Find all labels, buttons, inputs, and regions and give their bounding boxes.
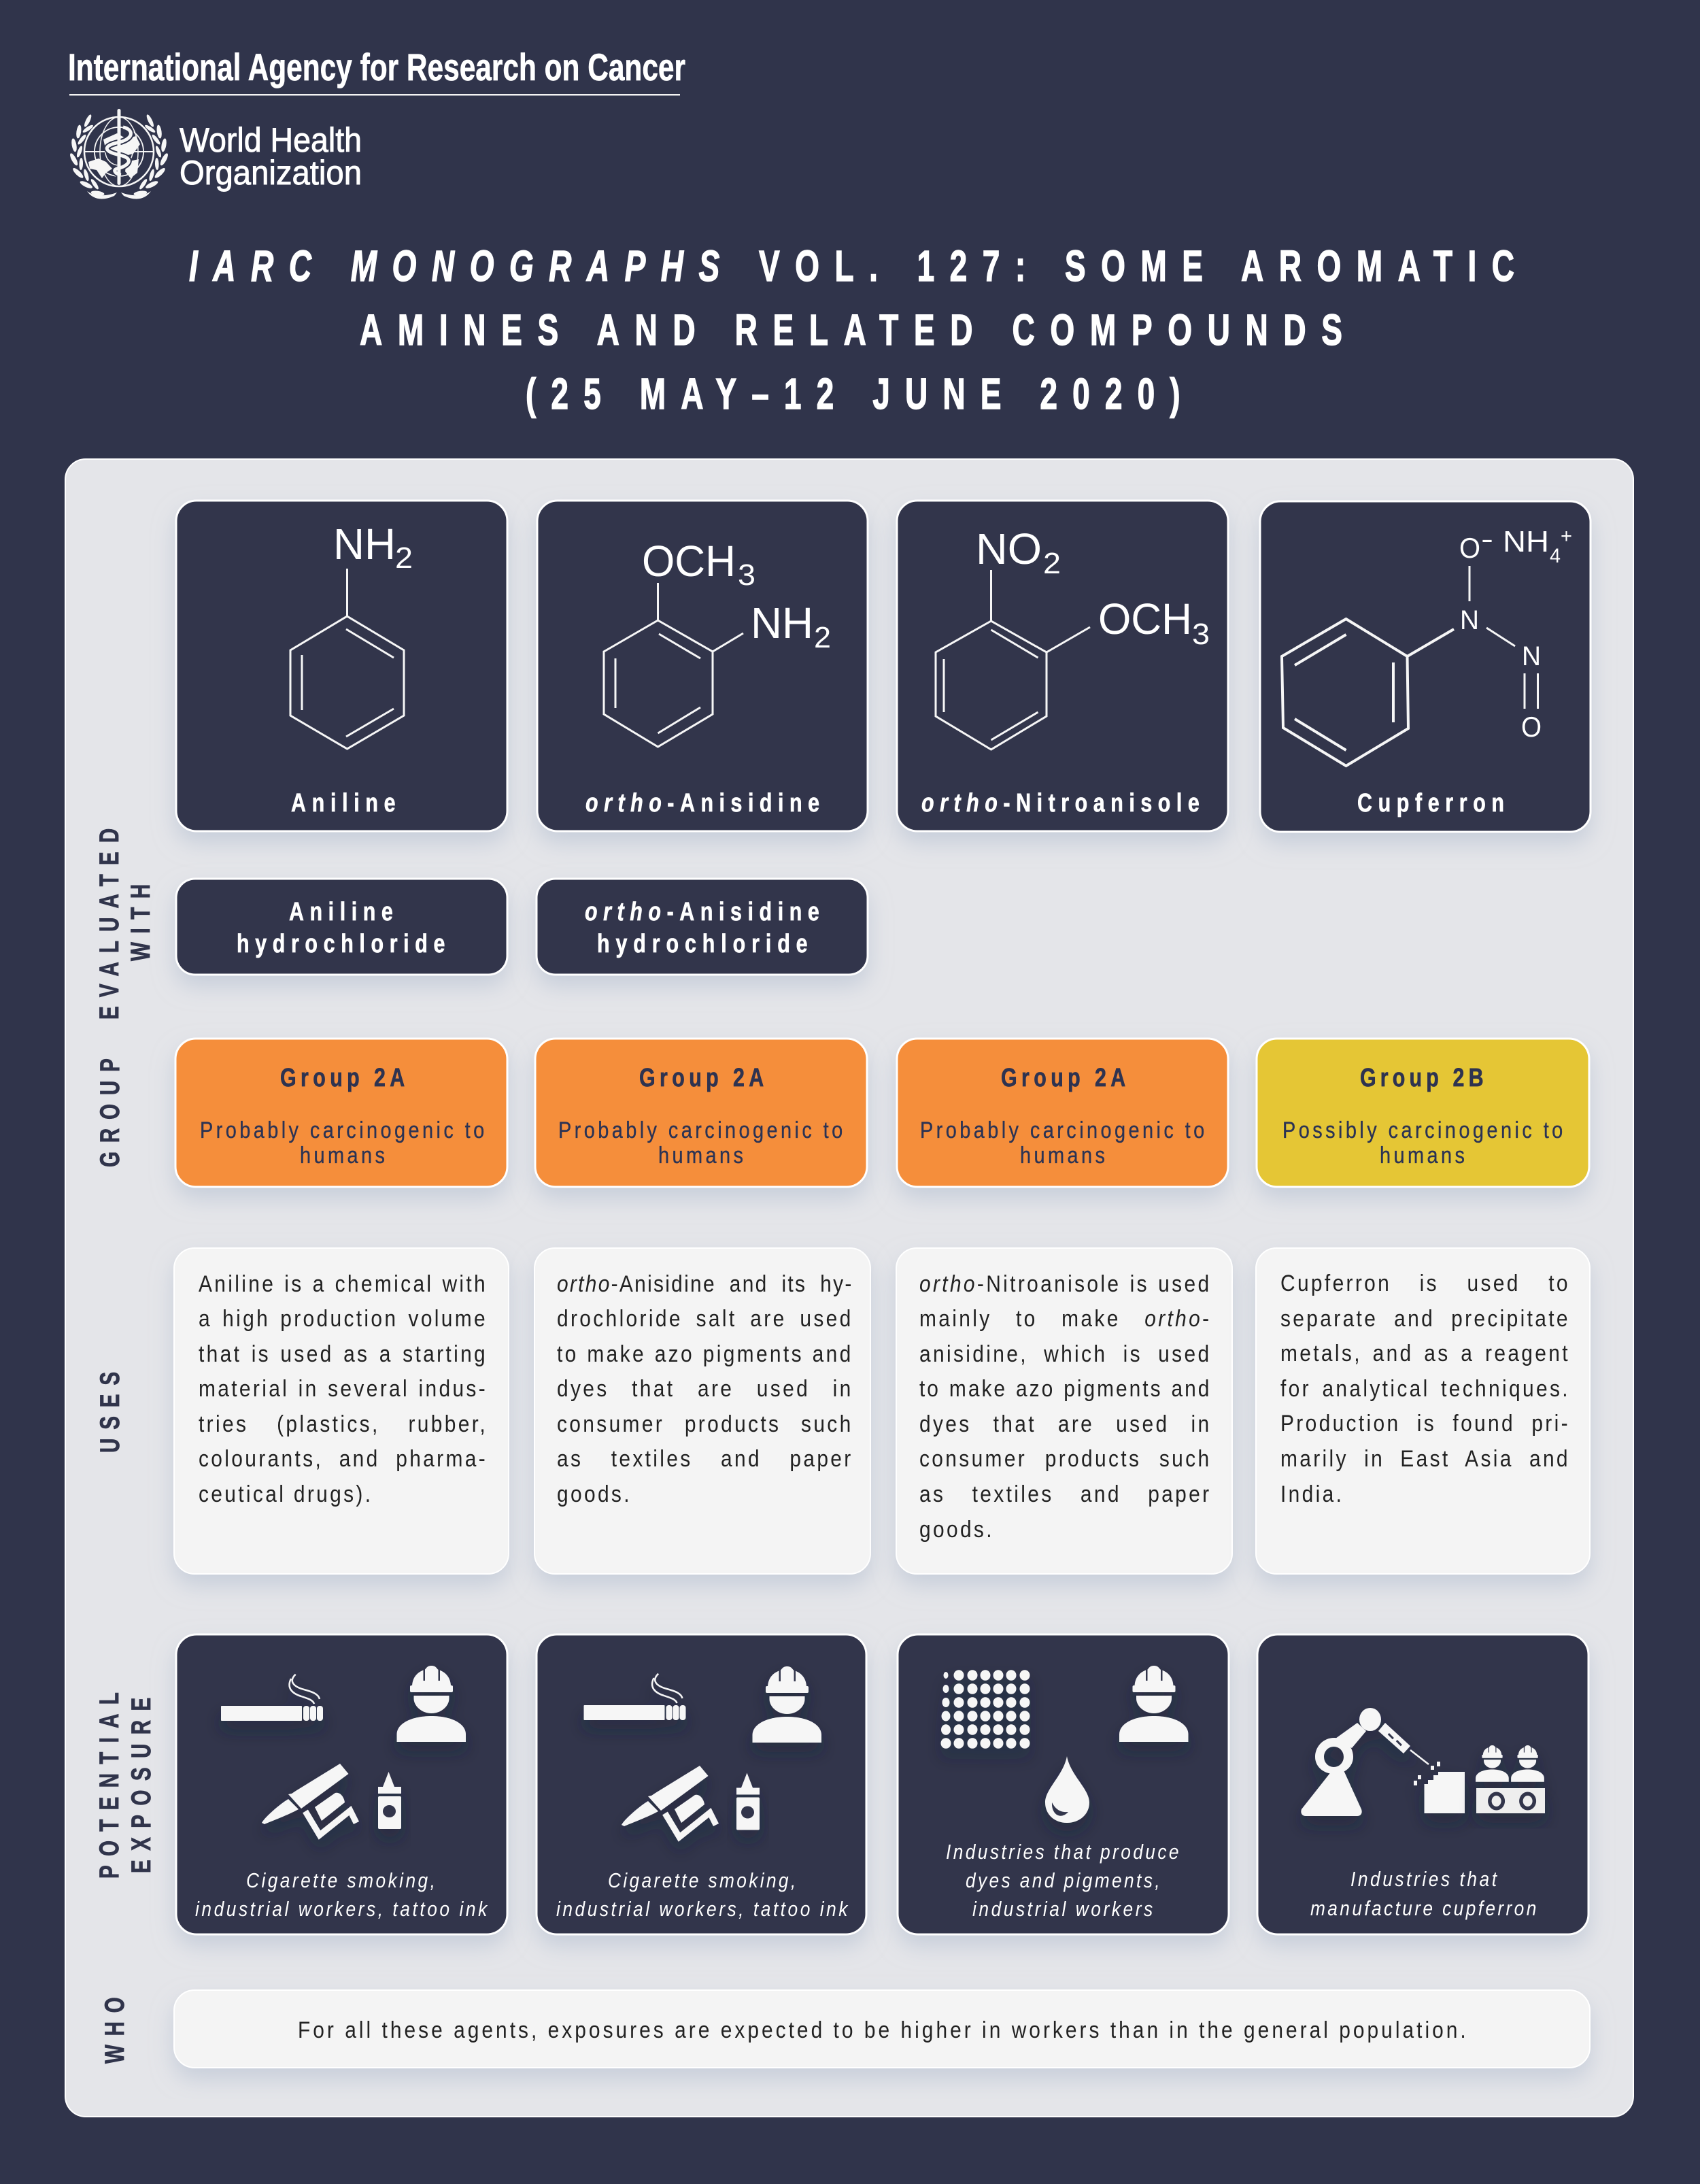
title: (25 MAY–12 JUNE 2020) [526,370,1180,418]
icon: industrial worker [752,1666,821,1743]
structure: ortho-anisidine molecule: 2 [814,621,831,654]
icon: industrial worker [1119,1666,1189,1742]
uses card: ortho-Anisidine: goods. [557,1481,632,1507]
structure: aniline molecule: NH [333,520,396,569]
group card: Aniline Group 2A: Group 2A [280,1064,405,1092]
exposure card: Aniline [176,1634,507,1934]
group card: Cupferron Group 2B: humans [1380,1142,1465,1169]
uses card: Cupferron: Production is found pri- [1280,1411,1570,1437]
uses card: Cupferron [1256,1248,1611,1574]
icon: dye drop [1045,1756,1089,1823]
uses card: ortho-Anisidine: as textiles and paper [557,1446,853,1472]
exposure card: ortho-Nitroanisole [898,1634,1229,1934]
uses card: Cupferron: separate and precipitate [1280,1306,1570,1332]
exposure card: ortho-Anisidine [537,1634,866,1934]
group card: Aniline Group 2A [175,1039,507,1187]
callout: who is exposed [174,1990,1590,2068]
group card: ortho-Nitroanisole Group 2A [897,1039,1228,1187]
icon: material block [1414,1762,1465,1813]
structure: cupferron molecule: N [1460,605,1479,635]
row label: potential exposure [95,1692,156,1879]
title [189,242,1514,418]
uses card: ortho-Anisidine: ortho-Anisidine and its hy- [557,1271,853,1296]
uses card: ortho-Anisidine: drochloride salt are used [557,1306,853,1332]
icon: robotic arm [1301,1708,1429,1816]
structure: cupferron molecule: O [1521,711,1542,743]
heading: International Agency for Research on Cancer: International Agency for Research on Cancer [68,46,685,88]
caption: industrial workers [972,1898,1153,1921]
card: ortho-Anisidine hydrochloride [537,879,868,975]
structure: ortho-anisidine molecule [604,537,831,747]
row label: evaluated with: EVALUATED [95,828,124,1020]
card: ortho-Anisidine hydrochloride: hydrochloride [597,930,808,958]
structure: ortho-nitroanisole molecule [936,524,1210,750]
uses card: Cupferron: India. [1280,1481,1344,1507]
icon: cigarette [583,1674,685,1720]
card: ortho-Anisidine hydrochloride: ortho-Anisidine [585,898,819,926]
group card: ortho-Anisidine Group 2A: Probably carcinogenic to [558,1117,843,1143]
caption: Cigarette smoking, [246,1869,435,1893]
uses card: Cupferron: marily in East Asia and [1280,1446,1570,1472]
caption [946,1841,1179,1921]
caption [195,1869,488,1921]
icon: ink bottle [378,1772,401,1829]
caption [556,1869,849,1921]
icon: pigment dots [941,1670,1030,1749]
uses card: ortho-Anisidine: dyes that are used in [557,1376,853,1402]
structure: cupferron molecule: - [1481,524,1493,554]
group card: ortho-Anisidine Group 2A [535,1039,867,1187]
caption: Cigarette smoking, [608,1869,796,1893]
icon: ink bottle [736,1773,760,1830]
structure: cupferron molecule: O [1459,532,1480,564]
uses card: ortho-Nitroanisole: ortho-Nitroanisole is used [919,1271,1211,1296]
uses card: Cupferron: for analytical techniques. [1280,1376,1570,1402]
structure: ortho-anisidine molecule: OCH [642,537,736,586]
icon: WHO emblem [69,109,169,199]
group card: ortho-Anisidine Group 2A: humans [658,1142,743,1169]
name: Cupferron: Cupferron [1357,789,1504,818]
row label: evaluated with: WITH [126,884,156,961]
uses card: Aniline: ceutical drugs). [199,1481,373,1507]
name: ortho-Anisidine: ortho-Anisidine [585,789,819,818]
group card: ortho-Nitroanisole Group 2A: Probably carcinogenic to [920,1117,1204,1143]
caption: Industries that [1350,1868,1497,1892]
uses card: ortho-Anisidine [534,1248,897,1574]
logo text: World Health Organization: Organization [180,154,362,192]
uses card: ortho-Nitroanisole: to make azo pigments and [919,1376,1211,1402]
caption: manufacture cupferron [1310,1897,1536,1921]
structure: ortho-nitroanisole molecule: OCH [1098,594,1192,643]
structure: aniline molecule [290,520,413,749]
name: ortho-Nitroanisole: ortho-Nitroanisole [921,789,1200,818]
row label: evaluated with [95,828,156,1020]
row label: uses: USES [95,1372,125,1453]
logo text: World Health Organization [180,121,362,192]
group card: Cupferron Group 2B [1257,1039,1589,1187]
icon: two workers [1476,1745,1544,1782]
structure: cupferron molecule [1282,524,1572,766]
uses card: Aniline [174,1248,528,1574]
structure: ortho-nitroanisole molecule: NO [976,524,1042,573]
group card: ortho-Nitroanisole Group 2A: Group 2A [1001,1064,1125,1092]
card: Aniline hydrochloride [176,879,507,975]
uses card: ortho-Anisidine: to make azo pigments and [557,1341,853,1367]
caption [1310,1868,1536,1921]
uses card: ortho-Anisidine: consumer products such [557,1411,853,1437]
rule under agency name [69,94,680,95]
title: IARC MONOGRAPHS VOL. 127: SOME AROMATIC [189,242,1514,290]
structure: ortho-anisidine molecule: 3 [738,558,755,592]
uses card: ortho-Nitroanisole: as textiles and paper [919,1481,1211,1507]
uses card: Aniline: colourants, and pharma- [199,1446,488,1472]
card: Aniline [176,501,507,831]
structure: cupferron molecule: + [1561,525,1572,548]
icon: cigarette [221,1675,323,1721]
header: IARC and WHO logos [68,46,685,199]
card: ortho-Anisidine [537,501,868,831]
group card: ortho-Nitroanisole Group 2A: humans [1020,1142,1105,1169]
structure: aniline molecule: 2 [395,541,413,575]
structure: cupferron molecule: 4 [1550,545,1561,567]
group card: Aniline Group 2A: humans [300,1142,385,1169]
structure: cupferron molecule: N [1522,641,1541,671]
uses card: ortho-Nitroanisole: consumer products such [919,1446,1211,1472]
uses card: ortho-Nitroanisole [896,1248,1254,1574]
uses card: ortho-Nitroanisole: goods. [919,1517,994,1543]
panel: main content [65,459,1633,2117]
uses card: ortho-Nitroanisole: dyes that are used in [919,1411,1211,1437]
card: ortho-Nitroanisole [897,501,1228,831]
row label: group: GROUP [95,1058,125,1167]
structure: ortho-nitroanisole molecule: 2 [1043,547,1061,580]
exposure card: Cupferron [1257,1634,1588,1934]
caption: industrial workers, tattoo ink [195,1898,488,1921]
uses card: Aniline: a high production volume [199,1306,488,1332]
row label: who: WHO [100,1997,130,2064]
uses card: Aniline: Aniline is a chemical with [199,1271,488,1296]
structure: ortho-anisidine molecule: NH [751,599,813,648]
group card: ortho-Anisidine Group 2A: Group 2A [639,1064,764,1092]
group card: Cupferron Group 2B: Possibly carcinogenic to [1282,1117,1563,1143]
uses card: Aniline: tries (plastics, rubber, [199,1411,488,1437]
card: Aniline hydrochloride: Aniline [289,898,393,926]
uses card: Cupferron: metals, and as a reagent [1280,1341,1570,1366]
icon: tattoo machine [262,1764,356,1835]
uses card: Aniline: that is used as a starting [199,1341,488,1367]
uses card: ortho-Nitroanisole: mainly to make ortho- [919,1306,1211,1332]
structure: cupferron molecule: NH [1503,525,1549,558]
group card: Cupferron Group 2B: Group 2B [1360,1064,1484,1092]
card: Cupferron [1260,501,1591,832]
caption: dyes and pigments, [966,1869,1160,1893]
row label: potential exposure: EXPOSURE [126,1698,156,1873]
name: Aniline: Aniline [291,789,396,818]
caption: Industries that produce [946,1841,1179,1864]
uses card: ortho-Nitroanisole: anisidine, which is used [919,1341,1211,1367]
callout: who is exposed: For all these agents, exposures are expected to be higher in workers than in the general population. [298,2017,1466,2043]
logo text: World Health Organization: World Health [180,121,362,159]
icon: industrial worker [397,1666,466,1742]
title: AMINES AND RELATED COMPOUNDS [360,306,1342,354]
structure: ortho-nitroanisole molecule: 3 [1192,618,1210,651]
icon: machine [1476,1788,1545,1813]
row label: potential exposure: POTENTIAL [95,1692,124,1879]
uses card: Cupferron: Cupferron is used to [1280,1271,1570,1296]
icon: tattoo machine [622,1766,716,1837]
group card: Aniline Group 2A: Probably carcinogenic to [200,1117,484,1143]
caption: industrial workers, tattoo ink [556,1898,849,1921]
card: Aniline hydrochloride: hydrochloride [237,930,445,958]
uses card: Aniline: material in several indus- [199,1376,488,1402]
